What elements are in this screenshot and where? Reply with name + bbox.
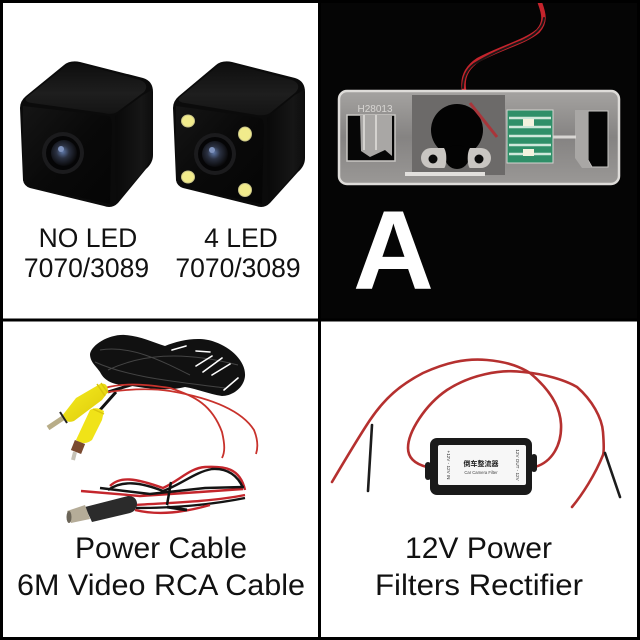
label: filters rectifier: Filters Rectifier xyxy=(375,569,583,602)
housing left window xyxy=(347,115,395,161)
coiled power cable xyxy=(81,467,245,513)
label: RCA cable: 6M Video RCA Cable xyxy=(17,569,305,602)
plug one xyxy=(48,383,108,428)
filter box left specification: +12V - 12V IN xyxy=(446,451,451,479)
keyhole cutout xyxy=(431,104,483,169)
label: no LED model: 7070/3089 xyxy=(24,253,149,283)
filter box xyxy=(425,438,537,495)
panel: cables xyxy=(17,335,305,602)
label: 4 LED: 4 LED xyxy=(204,223,278,253)
plug two xyxy=(73,408,104,460)
housing right window xyxy=(553,110,608,168)
LED dots xyxy=(182,115,252,196)
label: 12V power: 12V Power xyxy=(405,532,552,565)
label: 4 LED model: 7070/3089 xyxy=(175,253,301,283)
housing moulded code: H28013 xyxy=(357,104,393,115)
housing centre recess xyxy=(405,95,505,176)
housing LED board xyxy=(507,110,553,163)
label: no LED: NO LED xyxy=(39,223,137,253)
panel: license plate light housing xyxy=(320,0,640,320)
filter wires xyxy=(332,360,620,507)
red video trigger wires xyxy=(105,385,257,458)
RCA plugs xyxy=(48,383,108,460)
large letter A: A xyxy=(353,188,434,313)
filter box right specification: 12V OUT - 12V xyxy=(515,449,520,482)
plate housing xyxy=(339,91,619,184)
filter box subtitle: Car Camera Filter xyxy=(464,470,498,475)
camera: 4 LED xyxy=(173,61,305,207)
panel: power filter xyxy=(332,360,620,602)
label: power cable: Power Cable xyxy=(75,532,247,565)
panel: cameras xyxy=(20,61,305,283)
DC plug xyxy=(66,496,137,523)
coiled video cable xyxy=(90,335,245,410)
housing wire xyxy=(463,3,544,90)
mount plate xyxy=(421,148,491,168)
camera: no LED xyxy=(20,61,153,207)
filter box title: 倒车整流器 xyxy=(464,459,498,468)
